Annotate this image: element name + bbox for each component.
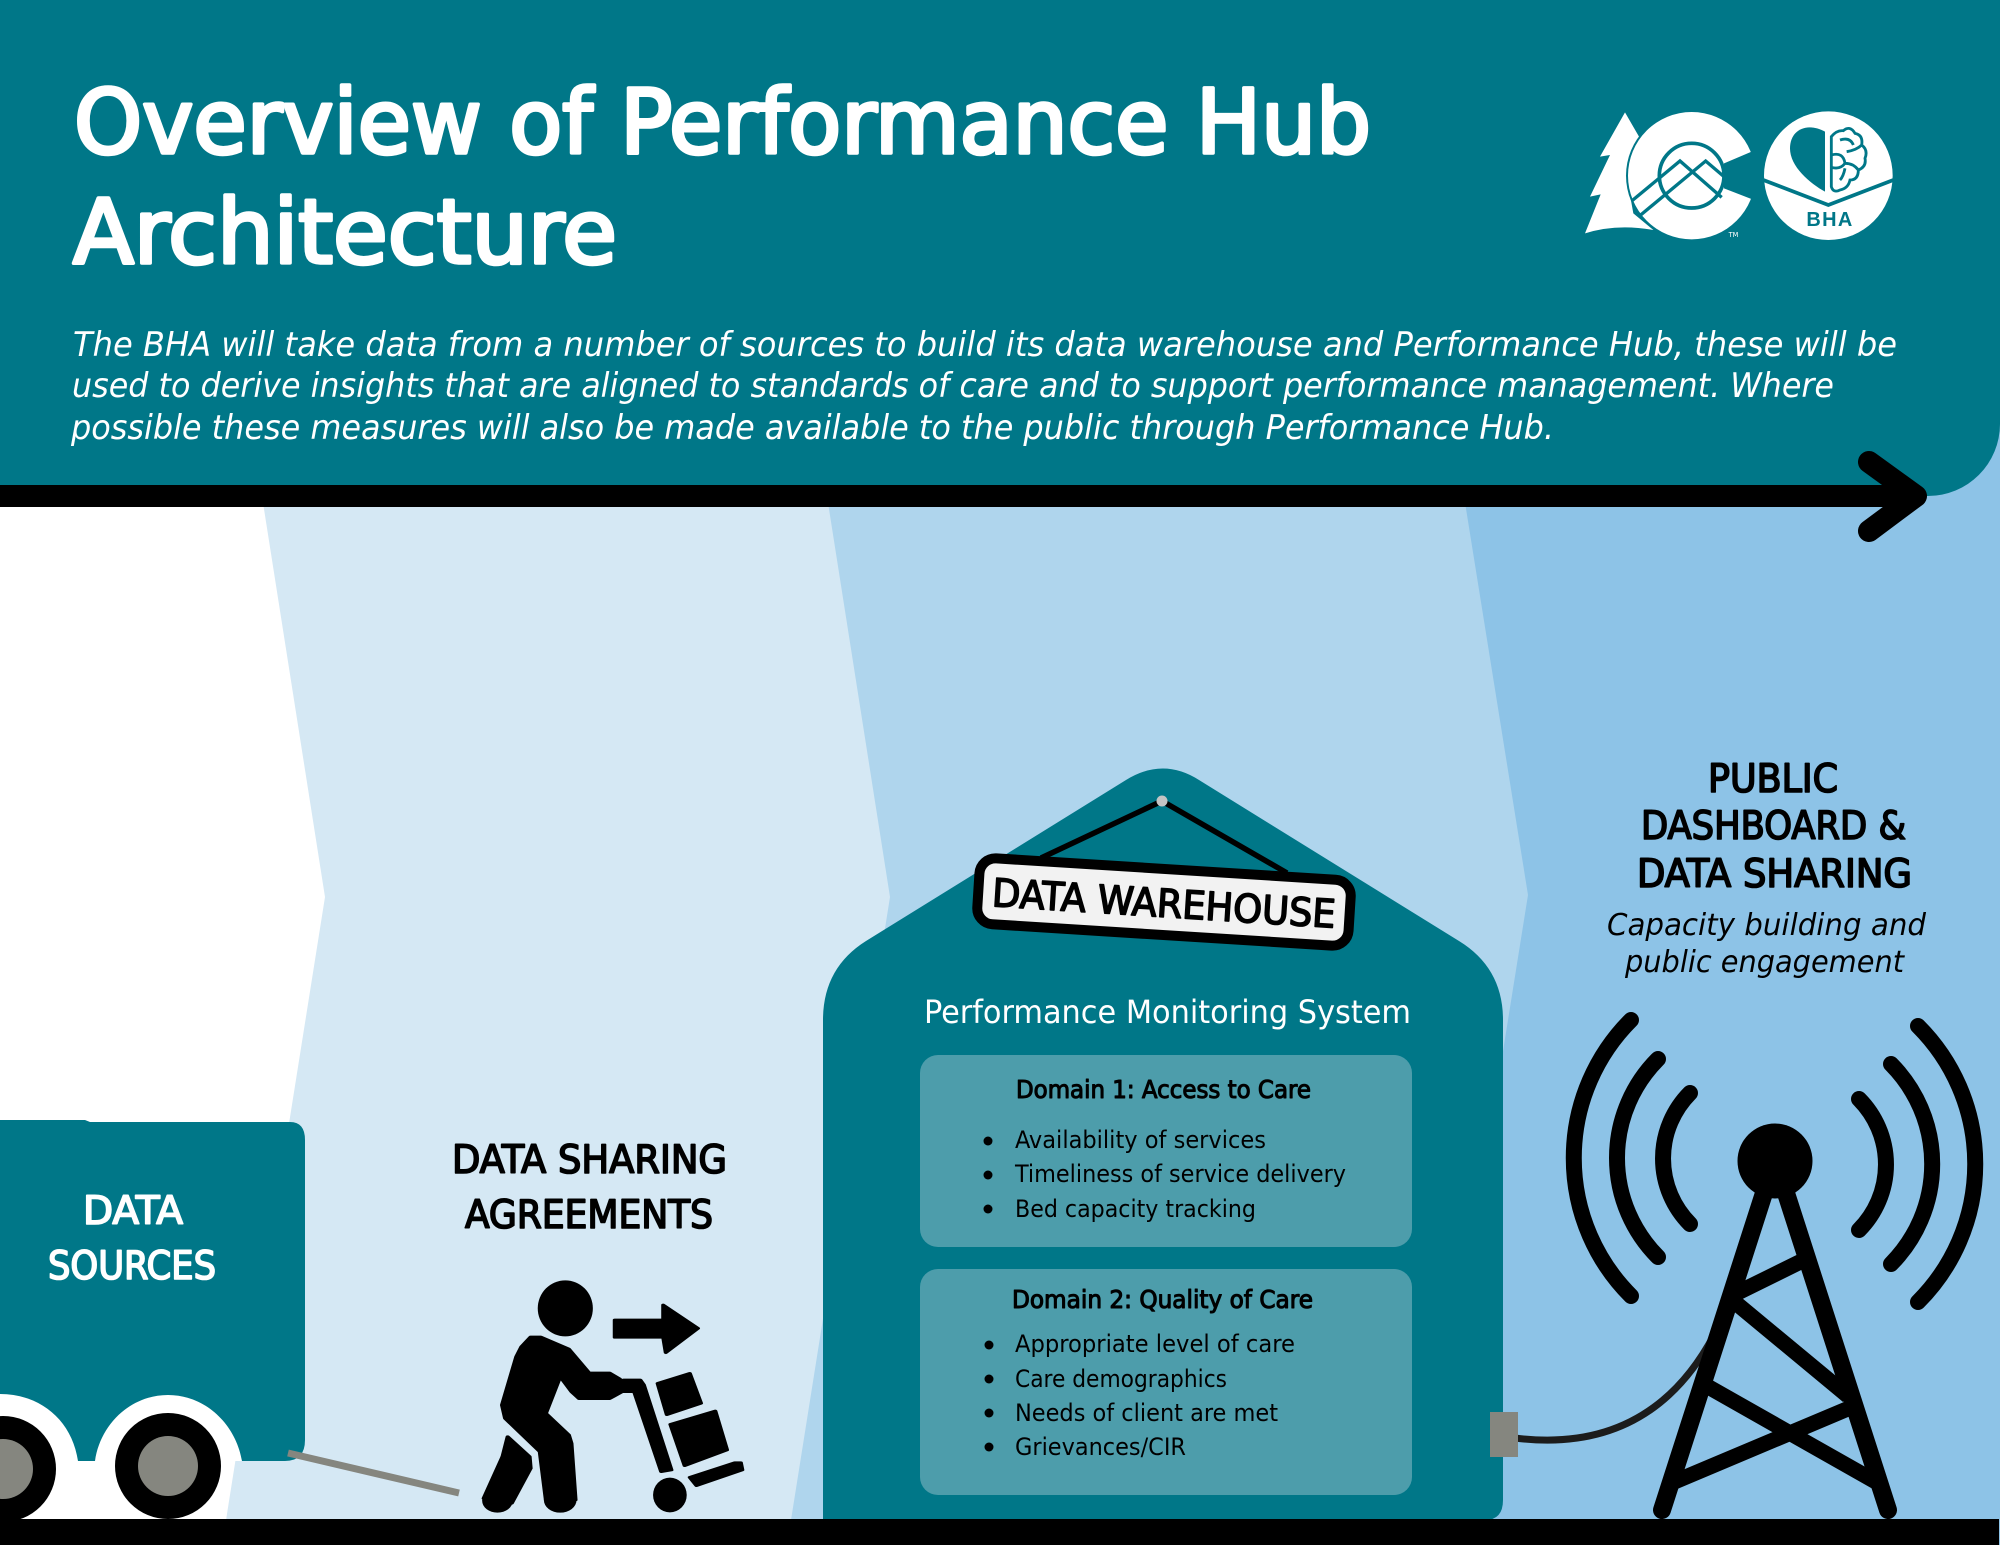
chevron band: data sharing light blue [0, 490, 890, 1520]
tow bar [288, 1453, 459, 1493]
chevron band: data sources white [0, 490, 325, 1520]
panel: domain 2 [920, 1269, 1412, 1495]
heading: public dashboard and data sharing: PUBLIC [1708, 757, 1838, 802]
data warehouse sign: DATA WAREHOUSE [991, 871, 1337, 938]
data sources label: SOURCES [48, 1244, 216, 1289]
heading: data sharing agreements: AGREEMENTS [465, 1193, 713, 1238]
wheel left [0, 1416, 56, 1522]
panel: domain 2: Care demographics [1015, 1365, 1227, 1393]
wheel arches and floor [0, 1394, 242, 1520]
data sources label [48, 1189, 216, 1289]
title [73, 70, 1371, 284]
truck: data sources [0, 1120, 459, 1522]
icon: Colorado logo: TM [1728, 230, 1739, 239]
title: Overview of Performance Hub [74, 70, 1371, 174]
nail [1156, 796, 1168, 806]
sign hanger [1041, 801, 1287, 873]
chevron band: public dashboard mid-blue [0, 490, 1528, 1520]
icon: Colorado logo [1585, 110, 1767, 241]
icon: broadcast tower [1574, 1020, 1975, 1510]
plug [1490, 1412, 1518, 1457]
header panel [0, 0, 2000, 496]
panel: domain 2: Grievances/CIR [1015, 1433, 1186, 1461]
data warehouse sign [976, 857, 1352, 947]
title: Architecture [73, 180, 617, 284]
subheading: capacity building [1607, 908, 1927, 980]
panel: domain 2: Appropriate level of care [1015, 1330, 1295, 1358]
icon: BHA logo [1763, 111, 1893, 240]
heading: public dashboard and data sharing: DATA SHARING [1637, 852, 1912, 897]
panel: data warehouse house [823, 768, 1503, 1520]
panel: domain 1: Domain 1: Access to Care [1016, 1075, 1311, 1104]
ground line [0, 1519, 1999, 1545]
panel: domain 1: Timeliness of service delivery [1014, 1160, 1346, 1188]
heading: data sharing agreements [452, 1138, 727, 1238]
subheading: capacity building: public engagement [1624, 945, 1906, 980]
wheel right [115, 1413, 221, 1519]
performance monitoring system label: Performance Monitoring System [924, 993, 1411, 1031]
cable [1515, 1335, 1714, 1440]
intro paragraph: used to derive insights that are aligned to standards of care and to support performance management. Where [72, 366, 1834, 406]
panel: domain 2: Needs of client are met [1015, 1399, 1278, 1427]
subheading: capacity building: Capacity building and [1607, 908, 1927, 943]
icon: worker with hand truck and arrow [482, 1280, 742, 1513]
data sources label: DATA [83, 1189, 183, 1234]
intro paragraph: The BHA will take data from a number of sources to build its data warehouse and Performance Hub, these will be [73, 325, 1897, 365]
heading: public dashboard and data sharing: DASHBOARD & [1641, 804, 1906, 849]
heading: public dashboard and data sharing [1637, 757, 1912, 897]
intro paragraph: possible these measures will also be made available to the public through Performance Hub. [70, 408, 1554, 448]
intro paragraph [70, 325, 1897, 448]
panel: domain 1 [920, 1055, 1412, 1247]
arrow [0, 462, 1916, 531]
panel: domain 1: Bed capacity tracking [1015, 1195, 1256, 1223]
panel: domain 2: Domain 2: Quality of Care [1012, 1285, 1313, 1314]
heading: data sharing agreements: DATA SHARING [452, 1138, 727, 1183]
icon: BHA logo: BHA [1806, 209, 1852, 231]
panel: domain 1: Availability of services [1015, 1126, 1266, 1154]
